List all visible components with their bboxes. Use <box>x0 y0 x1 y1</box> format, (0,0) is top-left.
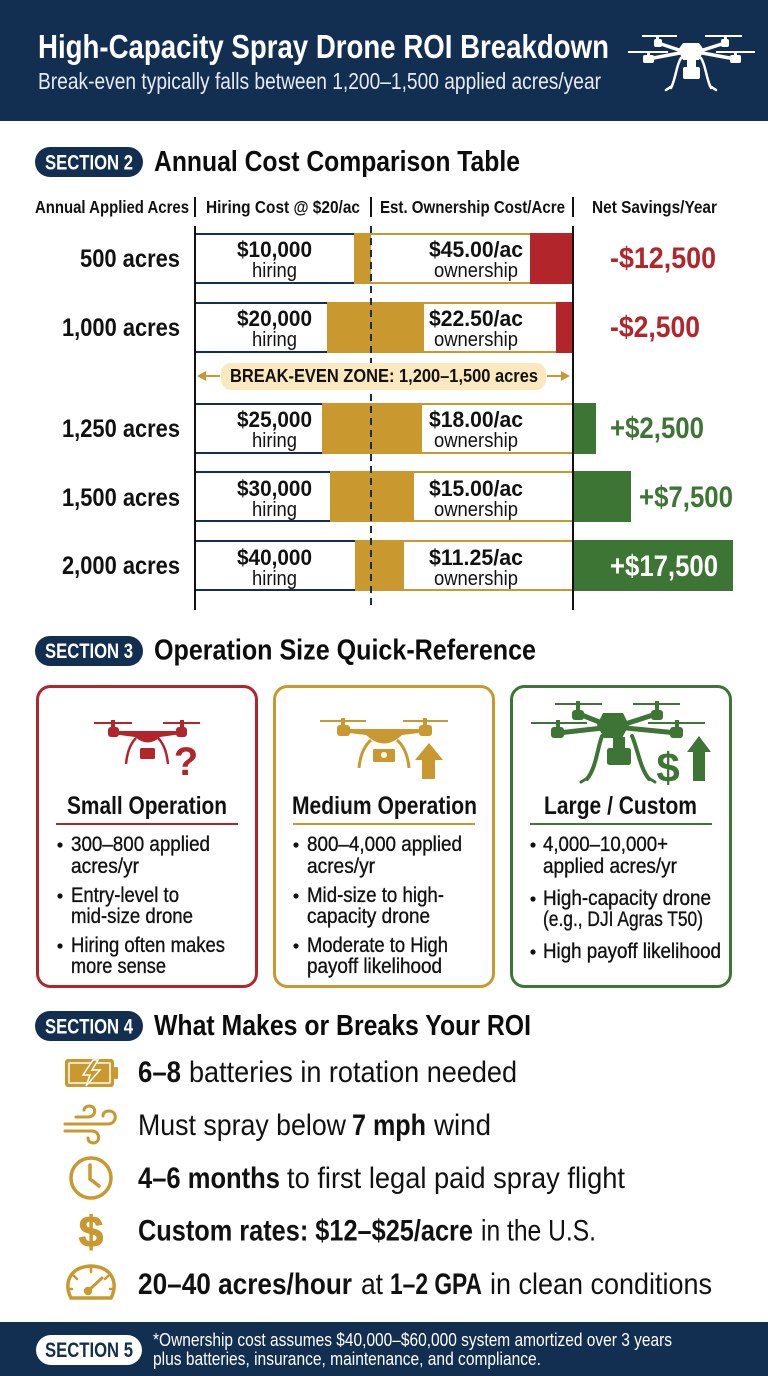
row: 2,000 acres: $40,000 <box>237 545 312 570</box>
footnote: *Ownership cost assumes $40,000–$60,000 system amortized over 3 years <box>153 1330 672 1350</box>
bullet list: (e.g., DJI Agras T50) <box>543 907 703 931</box>
heading: what makes or breaks your roi: What Makes or Breaks Your ROI <box>154 1010 531 1042</box>
arrow: right <box>547 371 570 381</box>
arrow: left <box>197 371 220 381</box>
row: 1,000 acres: 1,000 acres <box>62 314 180 342</box>
bullet list: 4,000–10,000+ <box>543 832 668 856</box>
row: 2,000 acres: $11.25/ac <box>429 545 523 570</box>
bullet list: acres/yr <box>307 854 375 878</box>
row: 1,000 acres <box>62 302 700 353</box>
icon: red drone with question mark: ? <box>174 740 198 784</box>
row: 500 acres: hiring <box>252 260 297 282</box>
bullet list: 800–4,000 applied <box>307 832 462 856</box>
item: custom rates: in the U.S. <box>481 1214 596 1248</box>
row: 500 acres: -$12,500 <box>610 242 716 275</box>
row: 2,000 acres: hiring <box>252 568 297 590</box>
icon: clock <box>71 1158 111 1198</box>
bullet list <box>293 832 462 978</box>
title: High-Capacity Spray Drone ROI Breakdown <box>38 28 609 65</box>
row: 1,000 acres: $22.50/ac <box>429 306 523 331</box>
bullet list: mid-size drone <box>71 904 193 928</box>
row: 1,500 acres: ownership <box>434 499 518 521</box>
icon: green drone with dollar and arrow: $ <box>656 744 680 791</box>
row: 1,250 acres: hiring <box>252 430 297 452</box>
footer banner <box>0 1322 768 1376</box>
icon: green drone with dollar and arrow <box>531 701 711 791</box>
item: speed: 1–2 GPA <box>390 1268 482 1301</box>
card title: Small Operation <box>67 792 227 820</box>
row: 1,000 acres: ownership <box>434 329 518 351</box>
card title: Medium Operation <box>292 792 477 820</box>
section 4 heading <box>35 1010 531 1042</box>
column headers: Net Savings/Year <box>592 197 717 217</box>
row: 1,500 acres: 1,500 acres <box>62 484 180 512</box>
panel: medium operation <box>274 686 494 986</box>
bullet list <box>57 832 225 978</box>
row: 1,000 acres: -$2,500 <box>610 311 700 344</box>
row: 1,250 acres: $25,000 <box>237 407 312 432</box>
bullet list: applied acres/yr <box>543 854 677 878</box>
item: wind: Must spray below <box>138 1109 346 1142</box>
row: 1,500 acres: $15.00/ac <box>429 476 523 501</box>
icon: gold drone with up arrow <box>320 718 448 779</box>
item: wind <box>65 1106 491 1143</box>
section 3 heading <box>35 634 536 666</box>
item: speed: 20–40 acres/hour <box>138 1268 352 1301</box>
icon: red drone with question mark <box>94 720 200 784</box>
bullet list: Hiring often makes <box>71 933 225 957</box>
section 3 pill <box>35 636 143 666</box>
row: 500 acres: ownership <box>434 260 518 282</box>
icon: gauge <box>68 1266 114 1298</box>
section 2 pill <box>35 147 143 177</box>
item: wind: wind <box>433 1109 491 1142</box>
footnote: plus batteries, insurance, maintenance, and compliance. <box>153 1349 541 1369</box>
column headers: Hiring Cost @ $20/ac <box>206 197 360 217</box>
bullet list: payoff likelihood <box>307 954 442 978</box>
item: custom rates <box>79 1208 596 1257</box>
column headers: Est. Ownership Cost/Acre <box>380 197 565 217</box>
bullet list: Entry-level to <box>71 883 179 907</box>
row: 500 acres: $10,000 <box>237 237 312 262</box>
section 4 pill <box>35 1011 143 1041</box>
table: annual cost comparison <box>35 197 733 610</box>
row: 1,000 acres: hiring <box>252 329 297 351</box>
heading: operation size quick-reference: Operation Size Quick-Reference <box>154 634 536 666</box>
item: speed: at <box>361 1268 384 1301</box>
section 2 pill: SECTION 2 <box>45 152 133 174</box>
bullet list: High-capacity drone <box>543 886 711 910</box>
subtitle: Break-even typically falls between 1,200–1,500 applied acres/year <box>38 68 601 94</box>
item: speed <box>68 1266 712 1301</box>
row: 1,250 acres <box>62 403 704 454</box>
icon: white drone <box>628 35 755 90</box>
item: speed: in clean conditions <box>490 1268 712 1301</box>
callout: break-even zone: BREAK-EVEN ZONE: 1,200–1,500 acres <box>230 366 538 386</box>
icon: battery <box>65 1059 118 1087</box>
item: batteries: batteries in rotation needed <box>189 1056 517 1089</box>
row: 500 acres: 500 acres <box>80 245 180 273</box>
bullet list: more sense <box>71 954 166 978</box>
section 3 pill: SECTION 3 <box>45 640 133 663</box>
callout: break-even zone <box>197 363 570 390</box>
item: timeline: 4–6 months <box>138 1162 280 1195</box>
item: timeline: to first legal paid spray flight <box>287 1162 626 1195</box>
panel: small operation <box>38 686 256 986</box>
row: 2,000 acres: ownership <box>434 568 518 590</box>
bullet list: Moderate to High <box>307 933 448 957</box>
bullet list: capacity drone <box>307 904 430 928</box>
header banner <box>0 0 768 121</box>
bullet list: acres/yr <box>71 854 139 878</box>
bullet list: High payoff likelihood <box>543 939 721 963</box>
row: 2,000 acres <box>62 540 733 591</box>
bullet list <box>530 832 721 963</box>
card title: Large / Custom <box>544 792 697 820</box>
row: 2,000 acres: +$17,500 <box>610 550 718 583</box>
row: 500 acres <box>80 233 716 284</box>
item: timeline <box>71 1158 626 1198</box>
item: custom rates: Custom rates: $12–$25/acre <box>138 1214 473 1248</box>
row: 1,250 acres: $18.00/ac <box>429 407 523 432</box>
row: 500 acres: $45.00/ac <box>429 237 523 262</box>
row: 1,250 acres: ownership <box>434 430 518 452</box>
column headers <box>35 197 717 217</box>
footnote <box>153 1330 672 1369</box>
item: wind: 7 mph <box>352 1109 426 1142</box>
section 5 pill <box>36 1335 142 1365</box>
bullet list: 300–800 applied <box>71 832 210 856</box>
row: 1,500 acres: +$7,500 <box>639 481 733 514</box>
row: 1,500 acres: hiring <box>252 499 297 521</box>
row: 2,000 acres: 2,000 acres <box>62 552 180 580</box>
section 4 pill: SECTION 4 <box>45 1016 133 1038</box>
row: 1,000 acres: $20,000 <box>237 306 312 331</box>
item: batteries: 6–8 <box>138 1056 181 1089</box>
column headers: Annual Applied Acres <box>35 197 189 217</box>
item: batteries <box>65 1056 517 1089</box>
icon: wind <box>65 1106 115 1143</box>
row: 1,500 acres <box>62 471 733 522</box>
bullet list: Mid-size to high- <box>307 883 444 907</box>
icon: dollar: $ <box>79 1208 103 1257</box>
row: 1,250 acres: 1,250 acres <box>62 415 180 443</box>
section 2 heading <box>35 146 520 178</box>
panel: large / custom <box>512 686 730 986</box>
row: 1,250 acres: +$2,500 <box>610 412 704 445</box>
row: 1,500 acres: $30,000 <box>237 476 312 501</box>
section 5 pill: SECTION 5 <box>45 1339 133 1362</box>
heading: annual cost comparison table: Annual Cost Comparison Table <box>154 146 520 178</box>
